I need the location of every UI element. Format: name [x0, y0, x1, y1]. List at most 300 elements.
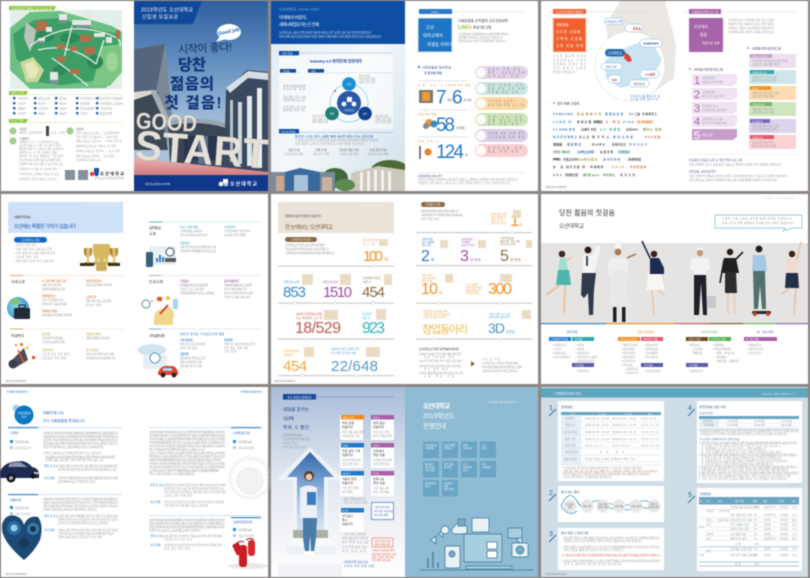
section: safety department: 소방설비기사 소방안전관리자 산업안전기사 위험물 자격 [164, 543, 223, 547]
illustration: red fire extinguishers [228, 538, 268, 569]
text block: intro list: • 학생 지원 시스템 우수 교육 환경 [14, 259, 55, 263]
panel: talent statement: 사고력 융합 역량 [285, 152, 304, 156]
section: automotive department: 졸업 후 진로 [44, 514, 58, 518]
illustration: pink road [134, 158, 268, 176]
tag: brown pill right [421, 202, 445, 207]
logo: Osan University contact block: 경기도 오산시 청학로 45 입학처 [94, 176, 125, 180]
panel: cautions text: 연락처 오류로 인한 불이익은 지원자 본인이 책임집니다 확인 바랍니다 [564, 539, 643, 543]
logos: partner companies grid: 아시아나항공 [577, 156, 597, 162]
heading: campus map tag [9, 6, 56, 11]
heading: admissions tag: 특수·취업과 협력학과 [288, 395, 312, 399]
panel: admission quota table: 정시 [792, 518, 797, 522]
panel: scholarship table: 나. 천재지변으로 인한 시험 응시 불가 시 환불 처리합니다 [701, 447, 767, 451]
list: five step process: 1 [694, 75, 700, 87]
section: electrical department: 전기기사 전기산업기사 전기공사 기사 전기 기능사 자격 지원 [164, 500, 225, 504]
section: electrical department: 스마트전기과는 전기 에너지와 스마트그리드 산업을 이끌어 갈 인재를 양성합니다 실습 위주 [149, 430, 226, 434]
list: department column 3: • 바이오식품계열 [712, 347, 732, 351]
text block: intro: 산업체와 함께 성장하는 [283, 433, 304, 437]
logos: partner companies grid: 에이스 침대 [643, 126, 661, 132]
panel: vision page [271, 1, 538, 191]
stat: 100%: 정규교과과정 [363, 238, 379, 242]
panel: application process flow: 원서 작성 [599, 502, 607, 506]
panel: talent statement: 오산대학교는 창의적 사고력과 실무 능력을 겸비하여 지역사회와 산업체에 기여합니다 [295, 138, 380, 142]
section: safety department: 소방 시설 설계와 안전 진단 실습 중심 교육으로 현장 적응력을 높이고 자격증을 취득합니다 [149, 522, 226, 526]
list: six LINC+ program pills: 교육과정 운영 [488, 74, 519, 78]
text block: intro list: • 자율적 학생 참여 [14, 243, 37, 247]
logos: partner companies grid: 애경산업 [620, 172, 635, 177]
icon: blue department badge [12, 404, 34, 424]
panel: admission quota table: 전기 자동화 과정 [730, 522, 749, 526]
chart: vision cycle diagram: 전문적 인재 [312, 114, 326, 118]
text block: intro: 실무 중심 특화 과정 [283, 445, 306, 449]
heading: people page title: 당찬 젊음의 첫걸음 [559, 208, 616, 217]
text block: purple intro [728, 18, 775, 34]
grid: admission tiles: 모집단위별 [444, 443, 455, 447]
section: mechanical department [8, 427, 122, 484]
grid: admission tiles: 및 문의 [444, 465, 451, 469]
legend: campus building list: 산학협력관 기숙사 [80, 96, 101, 100]
logos: partner companies grid: 현대중공업 [565, 172, 578, 177]
person: white shirt [581, 245, 600, 315]
heading: LINC+ tag: LINC+ [431, 10, 439, 14]
logos: partner companies grid: 포스코 [579, 134, 589, 139]
stats: startup club and 3D printing: 2019 지원 프로그램 [489, 312, 510, 316]
list: department column 3: - 제빵전공 [691, 351, 703, 355]
panel: scholarship table: 20,000원 [727, 423, 738, 427]
text block: intro list [14, 243, 56, 263]
list: department column 1: 기계융합공학계열 [551, 337, 568, 341]
panel: admission quota table: 토목 전공 [718, 518, 729, 522]
list: six LINC+ program pills: 학습공동체 운영 지원 [488, 135, 525, 139]
panel: industry partnership page [541, 1, 808, 191]
panel: scholarship table: 30,000원 [754, 419, 765, 423]
text block: bottom notes: 협약 기업체 우선 채용과 현장실습 지원금, 장학금 혜택을 받을 수 있습니다 자세한 사항은 문의 [689, 174, 788, 178]
text block: left goals [283, 84, 307, 112]
panel: admission quota table: 수시 [792, 505, 797, 509]
icon: step numbers with slashes: 3 [549, 531, 553, 538]
list: five step process: 맞춤형 교과목 개발 [702, 80, 724, 84]
panel: admission quota table: 30 [754, 513, 757, 517]
panel: admission quota table: 현장 맞춤 실습 과정 [730, 513, 753, 517]
panel: purple slogan box: 오산에서 [694, 24, 708, 29]
section: safety department: 전공 안내 문의 [238, 534, 255, 538]
panel: talent statement: 학생 중심의 교육과 산학협력으로 미래 사회를 주도합니다 [295, 142, 366, 146]
callout: blue bordered box: 031-370-2555 [374, 515, 389, 517]
table: admission schedule: 2018.12.12 ~ 12.14 [585, 437, 610, 441]
banner: top title flag: 신입생 모집요강 [142, 14, 178, 20]
callout: orange notice: 등록금 국가장학금 혜택 [372, 548, 394, 552]
legend: campus building list: 사회맞춤형 교육센터 [100, 101, 124, 105]
text block: directions by subway, bus and car: 천안역 1-3, 4, 7번 시내버스 이용 [19, 150, 58, 154]
section: international exchange: K-그룹 해외 프로그램 [42, 278, 66, 283]
list: six department benefits: 뷰티패션과 [752, 119, 763, 123]
list: department column 1: • 토목과 [575, 347, 585, 351]
legend: campus building list: 평생교육원 [100, 111, 113, 115]
stats: 18/529 923 [295, 309, 386, 337]
panel: admission quota table [697, 488, 802, 571]
panel: admission quota table: 15학점 [780, 513, 788, 517]
section: international exchange: 해외취업센터 [86, 278, 102, 283]
panel: application process flow: 모집요강 [566, 502, 574, 506]
arrow: triangle pointer [471, 361, 475, 366]
chart: vision cycle diagram: 창의 [330, 112, 334, 116]
heading: handwritten title: 학위 시 펼친 [283, 424, 309, 431]
section: value realisation: 취업지원 [224, 337, 233, 342]
panel: admission quota table: 2년제 [764, 553, 771, 557]
section: electrical department: 졸업 후 진로 [150, 483, 164, 487]
list: admission cards: 취업 맞춤 과정 운영 [342, 430, 365, 434]
stats: 853 1510 454: 취업보장 장학 [323, 280, 339, 284]
section: safety department: 다양한 안전 교육 프로그램과 체험 교육을 진행합니다 [149, 528, 202, 532]
table: admission schedule: * 전형일정은 입학처의 사정에 따라 변경될 수 있습니다 자세한 내용 확인 [562, 466, 643, 470]
list: department column 2: 인문사회계열 [637, 329, 654, 334]
panel: application process flow: 서류 제출 [615, 504, 623, 508]
section: value realisation: 기업 연계 [224, 350, 237, 354]
heading: cover main slogan: 당찬 [178, 56, 206, 74]
logos: partner companies grid: 유한킴벌리 [618, 149, 630, 154]
stat: 124: 124 [436, 142, 464, 163]
logos: partner companies grid: E-마트 [606, 119, 620, 124]
text block: award details: 오산대학교가 받은 정부재정지원사업 [419, 347, 459, 351]
list: admission cards: 맞춤학과 [342, 480, 353, 485]
stats: 10위 300: 공학 실습비 [466, 282, 478, 286]
legend: campus building list: 주차장 [80, 111, 88, 115]
stats: 2위 3년 연속 5년 연속: 선정 3년 연속 [461, 243, 476, 247]
text block: intro list: • 글로벌 역량 강화 [14, 255, 39, 259]
callout: orange notice: 전형료 면제 안내 [374, 542, 390, 546]
section: student welfare: 글로벌 기숙사 [86, 331, 101, 336]
illustration: campus bird's-eye map [10, 10, 122, 89]
banner: blue header: 내 삶에 가치더하는 [14, 214, 31, 219]
panel: admission quota table: 전공 [718, 499, 722, 503]
illustration: region map with partner logos: KIA [612, 78, 618, 82]
stats: 10위 300: 취업 순위 [422, 279, 432, 283]
logos: partner companies grid [553, 111, 661, 177]
section: value realisation: 대학을 빛내준 가치창조인재 채용 [180, 331, 224, 336]
banner: vision header: 오산대학교는 교육과 산업의 융합을 통해 창의적이고 실무 능력을 갖춘 전문 직업인을 양성합니다 [279, 30, 371, 34]
divider: row line 1 [278, 264, 394, 268]
section: character education [142, 276, 261, 325]
panel: vision diagram [279, 51, 393, 129]
stats: 2위 3년 연속 5년 연속: 3 [460, 248, 469, 265]
text block: directions by subway, bus and car: 중부고속도로 서이천 → 오산 방면 [76, 154, 115, 158]
section: electrical department: 실습 장비 및 기자재 지원 현장 전문가 특강 진행 전공 역량 강화 프로그램 취업 연계 운영 [149, 465, 226, 469]
logos: partner companies grid: 이마트 에브리 [553, 149, 570, 154]
panel: admission quota table: 30 [754, 527, 757, 531]
logos: partner companies grid: SAMSUNG [553, 112, 574, 116]
section: automotive department: 정비 자격증 취득과 협약 자동차 기업 현장실습으로 전문가로 성장할 수 있습니다 [43, 504, 119, 508]
stats: 454 22/648: 산학 취업 프로젝트 대상 [331, 351, 357, 355]
panel: admission quota table: 15학점 [780, 532, 788, 536]
text block: LINC+ selection: 기업체와 협력하여 교육과정을 운영합니다 [458, 36, 504, 40]
stat: 7 departments 6 [418, 80, 472, 108]
text block: intro: 기초로 대학의 전반적인 성과와 수상을 소개합니다 [285, 247, 330, 251]
list: six LINC+ program pills: 기업체 방문 교육 [488, 90, 519, 94]
panel: campus map and directions page [1, 1, 134, 191]
section: mechanical department: 자격 취득 [44, 476, 55, 480]
list: admission cards: 협력 중심 [373, 420, 385, 425]
section: electrical department: 전공 안내 문의 [238, 446, 255, 450]
legend: campus building list: 인문관 [18, 101, 26, 105]
stats: startup club and 3D printing: 학생들의 창업 아이템 발굴 [423, 312, 451, 316]
heading: people page title [559, 208, 616, 230]
chart: vision cycle diagram: 융합 기술 전문 [359, 80, 376, 84]
table: admission schedule: 2018.12.12 ~ 12.14 [612, 437, 636, 441]
grid: admission tiles: 장학제도 [425, 462, 435, 466]
illustration: region map with partner logos: SAMSUNG [643, 42, 659, 46]
panel: scholarship table: • 전형료를 납부 후 특별한 사유 없이 환불이 어렵습니다 확인 후 진행하시기 바랍니다 [699, 432, 788, 436]
icon: gold trophies [80, 244, 120, 271]
logos: partner companies grid: CJ ENM 방송 [553, 126, 575, 132]
person: flight attendant [707, 249, 743, 314]
table: admission schedule: 합격자 발표 후 대학 홈페이지 확인 가능 [585, 457, 636, 461]
list: five step process: 5 [694, 130, 700, 142]
panel: admission quota table: 30 [754, 547, 757, 551]
illustration: region map with partner logos: 오산대학교를 중심으로 한 [630, 94, 661, 98]
logos: partner companies grid: 현대백화점 [628, 156, 641, 162]
section: international exchange: 취업 상담과 해외 기업 연계 [86, 283, 113, 287]
text block: LINC+ selection: LINC [458, 25, 470, 31]
list: admission cards: 현장 맞춤 [373, 480, 385, 485]
stats: 2위 3년 연속 5년 연속: 2018 취업 [422, 237, 433, 241]
text block: right intro: 전문대학 평가 우수 대학에 선정된 학생 교육 성과 [421, 213, 464, 217]
section: automotive department: 입학정원 40명 [15, 506, 30, 510]
section: international exchange: 국제교류 [11, 279, 26, 284]
text block: directions by subway, bus and car: 영동고속도로 신갈 JC → 오산IC 진출 후 [76, 139, 123, 143]
text block: blue footer note: 기숙사 우선 입실 지원 [344, 564, 375, 568]
panel: admission quota table: 정시 [792, 522, 797, 526]
stats: 853 1510 454: 취업보장 공제 [284, 280, 300, 284]
section: practical education: 전공과 관련 기업체 체험 인턴십 프로그램 [180, 249, 217, 253]
heading: purple section tag: 사회맞춤형 취업 프로그램 [692, 10, 719, 14]
panel: admission quota table: 2년제 [764, 522, 771, 526]
grid: admission tiles: 전형내용 [463, 465, 473, 469]
tag: brown pill right: 진행중인 사업 [425, 203, 441, 207]
list: six LINC+ program pills: 기업체 공동 교재 개발 [488, 131, 525, 135]
list: department column 2: 공과계열 [644, 363, 652, 367]
stat: 100% [363, 238, 389, 265]
panel: orange slogan box: 교육 취업 연계 [556, 43, 583, 48]
list: department column 3: • 호텔조리과 [689, 369, 704, 373]
section: safety department: 입학정원 40명 [238, 528, 253, 532]
divider: right row line 4 [416, 338, 532, 340]
text block: directions by subway, bus and car: 사당역 7780-1번 이용 후 도보 5분 소요 [19, 162, 64, 166]
stats: 2위 3년 연속 5년 연속: 대학 경쟁력 [422, 240, 434, 244]
text block: LINC+ footnote: 대학과 산업체가 협력하여 교육과정을 공동으로 개발하고 운영하는 정부 재정지원 사업입니다 [418, 178, 519, 182]
divider: row line 4 [278, 374, 394, 377]
text block: LINC+ selection: 사회맞춤형 산학협력 선도전문대학 [458, 18, 508, 23]
illustration: region map with partner logos: 오산대학교 [608, 50, 622, 55]
legend: campus building list: 대학본관 [18, 96, 28, 100]
table: admission schedule: * 원서 접수 마감 시간 이후 접수 불가 면접고사 시 수험표와 신분증을 지참 하여 오시기 바랍니다 [562, 469, 658, 473]
section: student welfare [8, 329, 123, 368]
logos: partner companies grid: 풀무원 good [583, 172, 599, 177]
section: mechanical department: 자동화 장비와 CAD 교육으로 현장 맞춤형 기술 인력을 양성하여 다양한 기업에 취업합니다 [43, 434, 119, 438]
callout: orange notice [372, 538, 396, 562]
panel: cautions text: 합격 후 등록하지 않으면 합격이 취소됩니다 [564, 562, 623, 566]
section: international exchange: 어학과 직무 교육 지원 제공 [42, 302, 68, 306]
icon: QR codes [65, 170, 88, 180]
text block: LINC+ footnote [418, 172, 525, 185]
list: admission cards: 맞춤학과 [342, 452, 353, 457]
text block: left goals: 전문성 향상 프로그램 [283, 98, 306, 102]
text block: purple intro: 산업체와 함께 학생의 미래를 준비합니다 [728, 30, 775, 34]
table: admission schedule: 구 분 [570, 412, 575, 416]
grid: admission tiles: 전형요소 [444, 446, 454, 450]
panel: admission quota table: 20 [754, 532, 757, 536]
section: mechanical department: 오산대학교 기계과는 4차 산업혁명 시대에 필요한 기계 설계와 제조 실무 교육을 제공합니다 [43, 431, 119, 435]
panel: application process flow [558, 486, 664, 522]
panel: admission quota table: 15학점 [780, 505, 788, 509]
text block: intro [285, 243, 336, 255]
heading: facilities legend tag: 캠퍼스 안내 [11, 91, 24, 95]
panel: admission quota table: 245 [754, 562, 759, 566]
illustration: eight students in uniform [546, 240, 801, 322]
section: practical education: 실무중심 [149, 225, 161, 230]
banner: cover footer with logo [134, 175, 268, 191]
table: admission schedule: 2018.12.29 ~ [641, 416, 659, 420]
list: five step process [689, 66, 737, 142]
heading: social-customized stats: 사회맞춤형 참여학과 [422, 64, 451, 70]
text block: page footer: 2019 OSAN UNIVERSITY [5, 379, 27, 383]
heading: handwritten title [283, 406, 309, 431]
list: admission cards: 토목시공 [373, 477, 384, 481]
legend: campus building list: 공학관 [59, 96, 67, 100]
table: admission schedule: 수시1차 [598, 412, 605, 416]
logos: partner companies grid: 농심 [553, 164, 563, 169]
text block: directions by subway, bus and car: 병점역 33번 77-1 좌석 5-4번 오산대입구 [19, 147, 65, 151]
logos: partner companies grid: 한국타이어 [603, 156, 620, 162]
text block: partnership description: 수도권 중심에 위치한 [553, 54, 587, 58]
illustration: mechanical heart [2, 515, 42, 560]
legend: campus building list: 학생회관 [80, 101, 90, 105]
stat: 124: 참여 학생 수 [418, 139, 439, 143]
text block: partnership description: 산업체와 협약을 맺고 [553, 62, 587, 66]
section: electrical department: 협약 기업과 공동으로 교육과정을 운영하며 학생들의 취업 경쟁력을 높이고 있습니다 졸업생 [149, 437, 226, 441]
text block: award details: 2016년 특성화 전문대학 사업 선정 대학 [419, 364, 462, 368]
stat: 58: LINC+ 협약 업체 [418, 112, 437, 116]
illustration: arrow house with student [276, 447, 344, 577]
logos: partner companies grid: 메가박스 [592, 134, 609, 139]
illustration: region map with partner logos: 수도권 산업 클러스터 [630, 97, 658, 101]
text block: award details: 대학 기본역량 선정 [424, 355, 455, 359]
panel: blue slogan box: 학생들 저마다 [427, 41, 452, 48]
table: admission schedule: 2019.02.28 [641, 444, 660, 448]
grid: admission tiles: 전형일정 및 [425, 443, 437, 447]
text block: directions by subway, bus and car: 세마역 1번 출구 셔틀버스 무료 운행 [19, 154, 64, 158]
panel: scholarship table: 나. 수험생 본인 또는 보호자 명의 계좌로 반환하며 수수료는 제외 후 지급합니다 [701, 459, 788, 463]
section: international exchange: 교환학생 [86, 294, 96, 299]
panel: admission quota table: 비고 [792, 499, 796, 503]
text block: summary: 수상 및 선정 [482, 357, 501, 361]
list: five step process: 교과목 개발 [702, 90, 716, 94]
section: student welfare: 학생 통학 편의 제공 [42, 356, 67, 360]
stat: 7 departments 6: 7 [436, 88, 447, 108]
section: mechanical department: 졸업 후 진로 [44, 464, 58, 468]
icon: analytics dashboard [146, 247, 176, 267]
heading: purple section tag [684, 9, 796, 14]
panel: application process flow: 면접 및 [651, 502, 657, 506]
banner: vision header: 오산대학교 Vision 2025 [279, 6, 319, 12]
banner: beige header: OSAN UNIVERSITY [358, 204, 387, 208]
chart: vision cycle diagram: 창의 인재 [359, 74, 370, 78]
text block: notes under cards: 수업 연계 방문 실습 [342, 545, 368, 549]
section: electrical department: 전기 산업기사 자격 취득 후 전공 심화 과정 진학과 편입 지원 [164, 490, 227, 494]
legend: campus building list: 정보관 [59, 106, 67, 110]
section: international exchange: 해외 협약 대학 연수 [42, 283, 63, 287]
text block: left goals: 창의적 인성 함양을 통한 [283, 84, 307, 88]
section: safety department: 졸업 후 진로 [150, 534, 164, 538]
panel: scholarship table: 4. 감면 대상자는 원서 접수 시 선택 후 증빙 서류를 기한 내 입학처로 제출 해야 합니다 [699, 468, 790, 472]
list: admission cards: 취업 지원 협약 [342, 462, 359, 466]
person: engineer [690, 248, 710, 315]
stat: 100%: 100 [363, 248, 383, 265]
section: international exchange: 현지 기업 체험과 연수 [42, 298, 65, 302]
logos: partner companies grid: 에스케이텔레콤 [637, 119, 653, 124]
heading: partner companies: 협약 체결 산업체 [557, 100, 579, 106]
list: five step process: 산업체 협약 [702, 76, 716, 80]
stats: startup club and 3D printing: 창의 제작 실습 운영 [489, 315, 509, 319]
text block: LINC+ selection: 육성사업 선정 [473, 24, 492, 30]
list: admission cards: 현장 맞춤 교육 [373, 486, 390, 490]
heading: campus map tag: 오산대학교 캠퍼스 및 오시는 길 [11, 6, 52, 11]
legend: campus building list: 복지관 [38, 101, 46, 105]
stat: rank 1: 평가 수도권 [491, 218, 504, 222]
banner: teal header: 1. 전형일정 및 접수 안내 [553, 390, 581, 396]
illustration: grey backdrop [541, 243, 808, 323]
banner: beige header: 한 눈에보는 오산대학교 [285, 223, 333, 231]
text block: summary [482, 357, 523, 373]
panel: admission quota table: 인문 [706, 549, 711, 553]
panel: talent statement: 현장 실무 역량 [313, 152, 330, 156]
stats: 18/529 923: 학과 취업률과 규모 별 [296, 316, 323, 320]
list: department column 2: • 세무회계학 [621, 351, 636, 355]
banner: blue header: OSAN UNIVERSITY 2019 [87, 204, 121, 207]
stats: startup club and 3D printing: 창업동아리 활성화 지원 [423, 309, 448, 313]
panel: admission quota table: 40 [754, 505, 757, 509]
stats: 2위 3년 연속 5년 연속: 교육역량강화 [500, 236, 515, 240]
list: admission cards: 맞춤학과 [342, 424, 353, 429]
table: admission schedule: 원서접수 [565, 416, 575, 420]
stats: 454 22/648: 454 [283, 358, 307, 375]
text block: notes under cards: 협약 내용 장학 지원 등 [342, 536, 369, 540]
stats: 18/529 923: 923 [362, 320, 385, 337]
banner: blue header [8, 202, 123, 233]
panel: admissions spread [271, 387, 538, 577]
list: department column 3: 호텔조리계열 [688, 337, 701, 341]
section: practical education [146, 222, 261, 267]
legend: campus building list: 미래관 [18, 111, 26, 115]
list: department column 2: • 외식서비스 [644, 355, 659, 359]
list: admission cards: 특수 [342, 517, 348, 522]
section: electrical department: 졸업 후 전공 기업 취업과 진학 기회를 제공합니다 [149, 472, 196, 476]
stats: startup club and 3D printing: 3D [488, 320, 505, 336]
table: admission schedule: 전형일정 [561, 404, 573, 409]
list: six department benefits: 기업 취업 지원 과정 [752, 110, 775, 114]
heading: orange section tag: 수도권 산학협력 거점대학 [556, 10, 584, 14]
panel: scholarship table: 30,000원 [781, 423, 792, 427]
section: automotive department: 자동차 정비 산업기사 정비 기능사 검사 산업기사 도장 기능사 [58, 528, 119, 532]
section: electrical department: 전기 설비와 자동 제어 기술 실습을 통해 현장 실무 역량과 자격증 취득을 지원합니다 다양 [149, 434, 226, 438]
list: six department benefits [747, 46, 796, 149]
panel: admission quota table: 조리 [706, 536, 711, 540]
section: student welfare: 수도권 주요 지역 운행 [42, 352, 70, 356]
list: admission cards: 취업 연계 제공 [373, 462, 390, 466]
text block: directions by subway, bus and car: 수원역 5, 5-1, 7, 1-1번 하차 후 도보 [19, 140, 60, 144]
section: electrical department: 다양한 기업 연계 취업 [164, 494, 193, 498]
section: student welfare: 학생복지 [11, 333, 24, 338]
banner: beige header [278, 202, 394, 233]
